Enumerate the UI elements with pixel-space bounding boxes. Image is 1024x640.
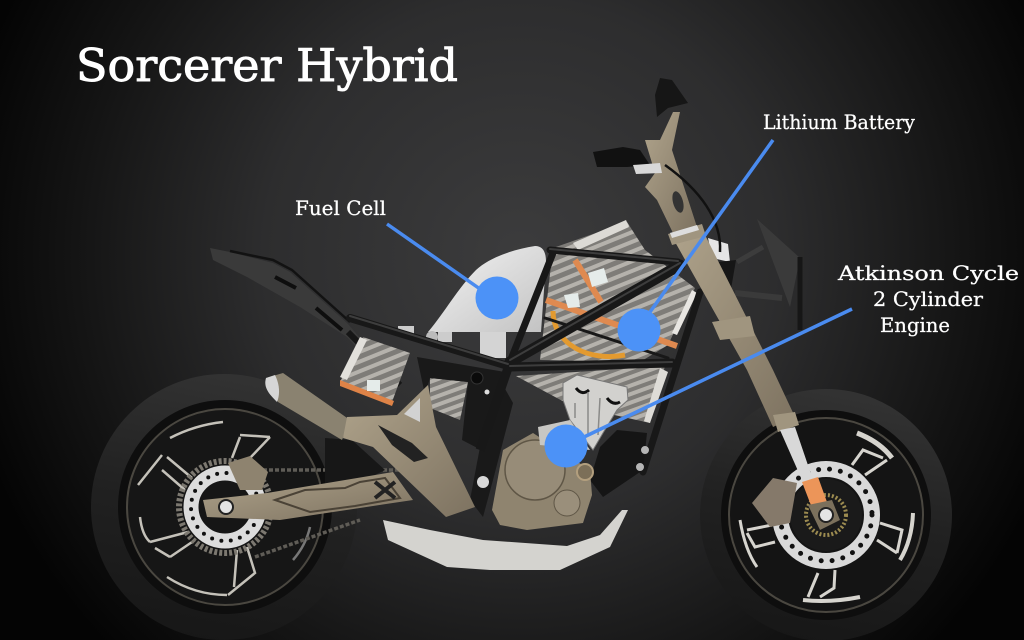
lower battery pack — [516, 366, 668, 423]
centre frame bracket — [417, 357, 505, 452]
front fork — [668, 224, 840, 530]
rear hugger — [325, 438, 385, 500]
orange battery straps — [546, 260, 677, 357]
engine side block — [590, 430, 647, 497]
label: Atkinson Cycle 2 Cylinder Engine: 2 Cylinder — [873, 287, 983, 311]
trellis frame — [350, 249, 700, 472]
upper lithium battery pack — [540, 220, 697, 362]
rear sprocket and chain — [179, 461, 271, 553]
callout: engine marker — [544, 309, 852, 468]
motorcycle illustration — [91, 78, 952, 640]
front wheel — [700, 389, 952, 640]
callout: lithium battery marker — [618, 140, 773, 352]
label: Atkinson Cycle 2 Cylinder Engine — [837, 261, 1019, 337]
handlebar and stem — [593, 112, 720, 252]
belly pan — [383, 510, 628, 570]
swingarm — [203, 472, 413, 520]
label: Lithium Battery: Lithium Battery — [763, 110, 916, 134]
engine cylinder head — [563, 375, 628, 450]
battery label chips — [564, 268, 608, 308]
label: Fuel Cell: Fuel Cell — [295, 196, 386, 220]
brake caliper — [228, 456, 268, 490]
headlight mirror — [655, 78, 688, 117]
electronics box — [398, 326, 506, 358]
tail subframe — [210, 248, 400, 385]
engine crankcase — [492, 420, 649, 530]
rear wheel — [91, 374, 400, 640]
front caliper — [752, 478, 797, 527]
pivot plate — [470, 368, 513, 517]
fuel cell tank shape — [428, 246, 546, 332]
exhaust muffler — [265, 373, 350, 440]
rear frame plate — [343, 385, 475, 517]
front fender bracket — [708, 219, 800, 330]
rear lower battery pack — [340, 337, 468, 420]
callout: fuel cell marker — [387, 224, 518, 320]
label: Atkinson Cycle 2 Cylinder Engine: Engine — [880, 313, 950, 337]
title: Sorcerer Hybrid — [76, 39, 458, 92]
rear brake disc — [191, 473, 259, 541]
label: Atkinson Cycle 2 Cylinder Engine: Atkinson Cycle — [837, 261, 1019, 285]
front brake disc — [780, 469, 872, 561]
